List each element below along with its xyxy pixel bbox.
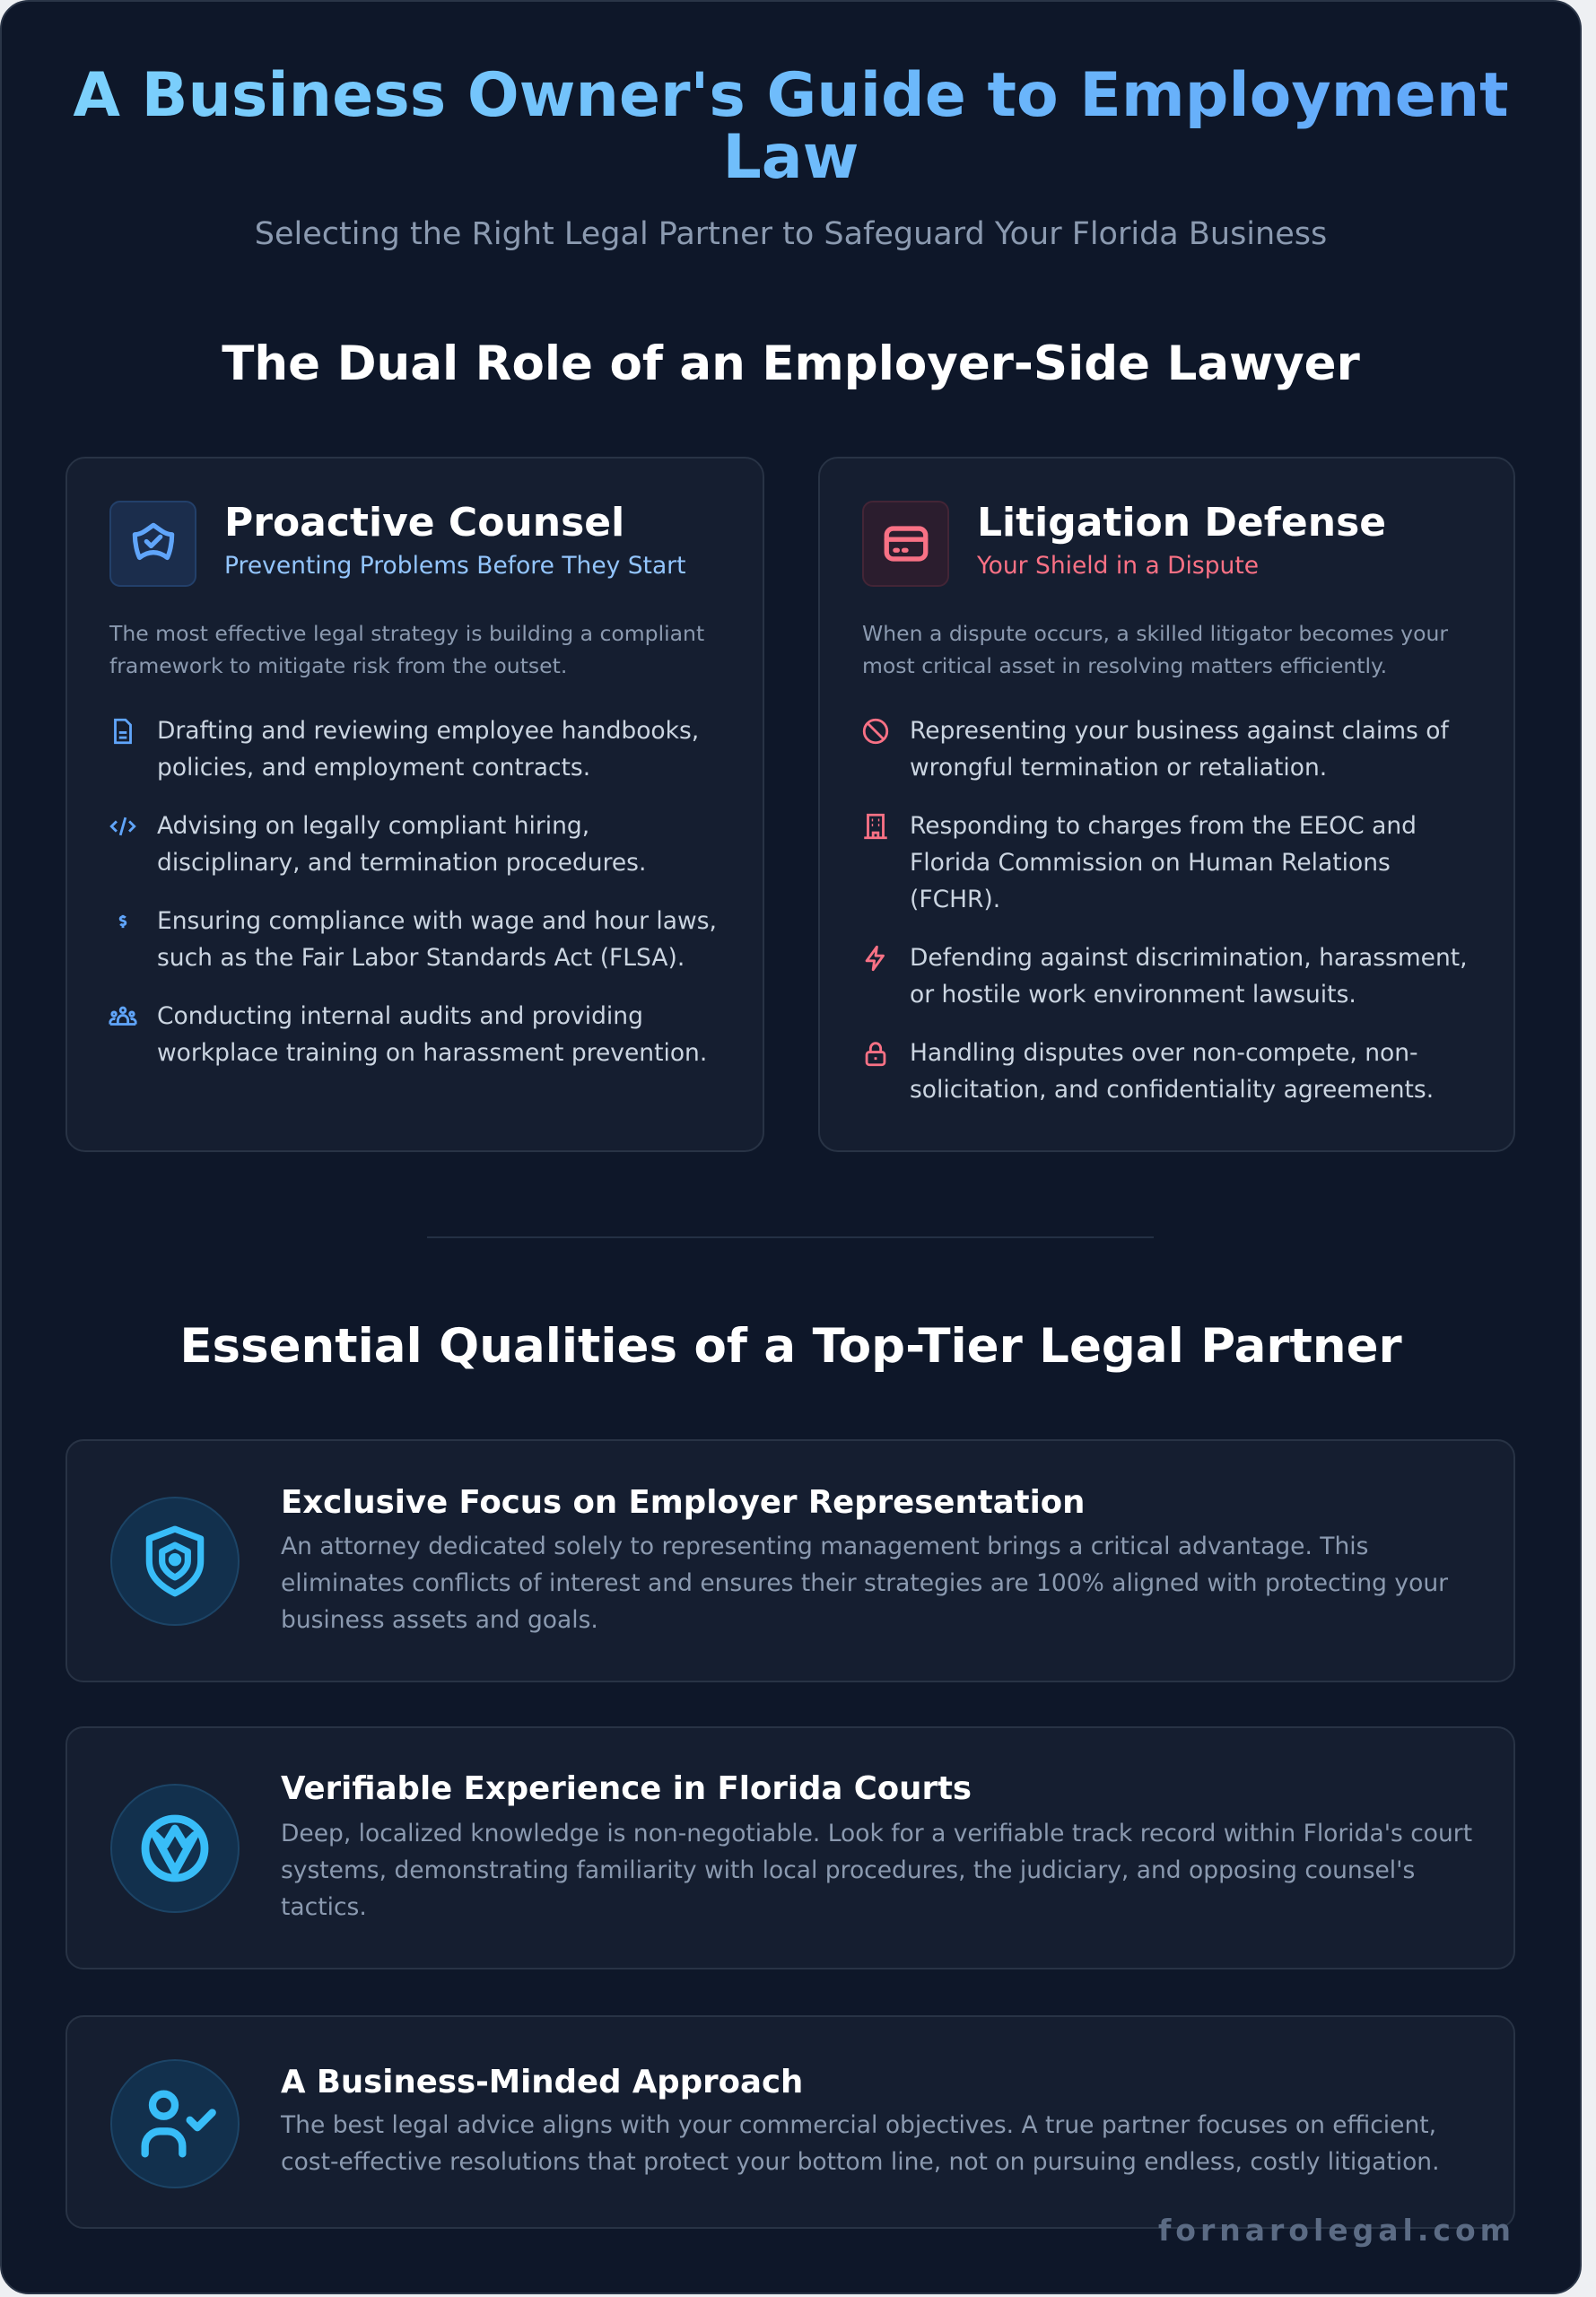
panel: litigation defense (818, 457, 1515, 1152)
card title: Exclusive Focus on Employer Representation (281, 1484, 1085, 1521)
footer: website: fornarolegal.com (1158, 2213, 1515, 2248)
bullet: wrongful termination: Representing your business against claims of wrongful termination or retaliation. (910, 717, 1449, 782)
icon: user check (110, 2059, 240, 2188)
card description: Deep, localized knowledge is non-negotiable. Look for a verifiable track record within Florida's court systems, demonstrating familiarity with local procedures, the judiciary, and opposing counsel's tactics. (281, 1820, 1472, 1921)
bullet: non-compete: Handling disputes over non-compete, non-solicitation, and confidentiality agreements. (910, 1039, 1434, 1104)
bullet: discrimination: Defending against discrimination, harassment, or hostile work environment lawsuits. (910, 944, 1468, 1009)
bullet: handbooks: Drafting and reviewing employee handbooks, policies, and employment contracts. (157, 717, 699, 782)
panel title: Proactive Counsel (224, 500, 624, 546)
bullet: hiring: Advising on legally compliant hiring, disciplinary, and termination procedures. (157, 812, 646, 877)
bullet: audits: Conducting internal audits and providing workplace training on harassment prevention. (157, 1002, 707, 1067)
card title: A Business-Minded Approach (281, 2064, 803, 2100)
heading: dual role: The Dual Role of an Employer-Side Lawyer (222, 336, 1360, 391)
intro text: When a dispute occurs, a skilled litigator becomes your most critical asset in resolving matters efficiently. (862, 621, 1448, 678)
title (0, 65, 1582, 188)
quality card: exclusive focus (65, 1439, 1515, 1682)
panel title: Litigation Defense (977, 500, 1386, 546)
panel subtitle: Preventing Problems Before They Start (224, 552, 685, 580)
bullet: EEOC: Responding to charges from the EEOC and Florida Commission on Human Relations (FCHR). (910, 812, 1417, 913)
heading: essential qualities: Essential Qualities of a Top-Tier Legal Partner (179, 1319, 1402, 1374)
card description: An attorney dedicated solely to representing management brings a critical advantage. This eliminates conflicts of interest and ensures their strategies are 100% aligned with protecting your business assets and goals. (281, 1533, 1448, 1634)
icon: card (862, 501, 949, 587)
card description: The best legal advice aligns with your commercial objectives. A true partner focuses on efficient, cost-effective resolutions that protect your bottom line, not on pursuing endless, costly litigation. (281, 2111, 1440, 2176)
card title: Verifiable Experience in Florida Courts (281, 1770, 972, 1807)
quality card: florida courts (65, 1726, 1515, 1969)
icon: shield check (109, 501, 196, 587)
panel: proactive counsel (65, 457, 764, 1152)
intro text: The most effective legal strategy is building a compliant framework to mitigate risk from the outset. (109, 621, 704, 678)
title: A Business Owner's Guide to Employment (73, 60, 1509, 131)
title: Law (722, 122, 859, 193)
quality card: business-minded (65, 2015, 1515, 2229)
icon: shield (110, 1497, 240, 1626)
panel subtitle: Your Shield in a Dispute (977, 552, 1259, 580)
icon: emblem (110, 1784, 240, 1913)
subtitle: Selecting the Right Legal Partner to Safeguard Your Florida Business (255, 216, 1327, 252)
bullet: wage: Ensuring compliance with wage and hour laws, such as the Fair Labor Standards Act (FLSA). (157, 907, 717, 972)
